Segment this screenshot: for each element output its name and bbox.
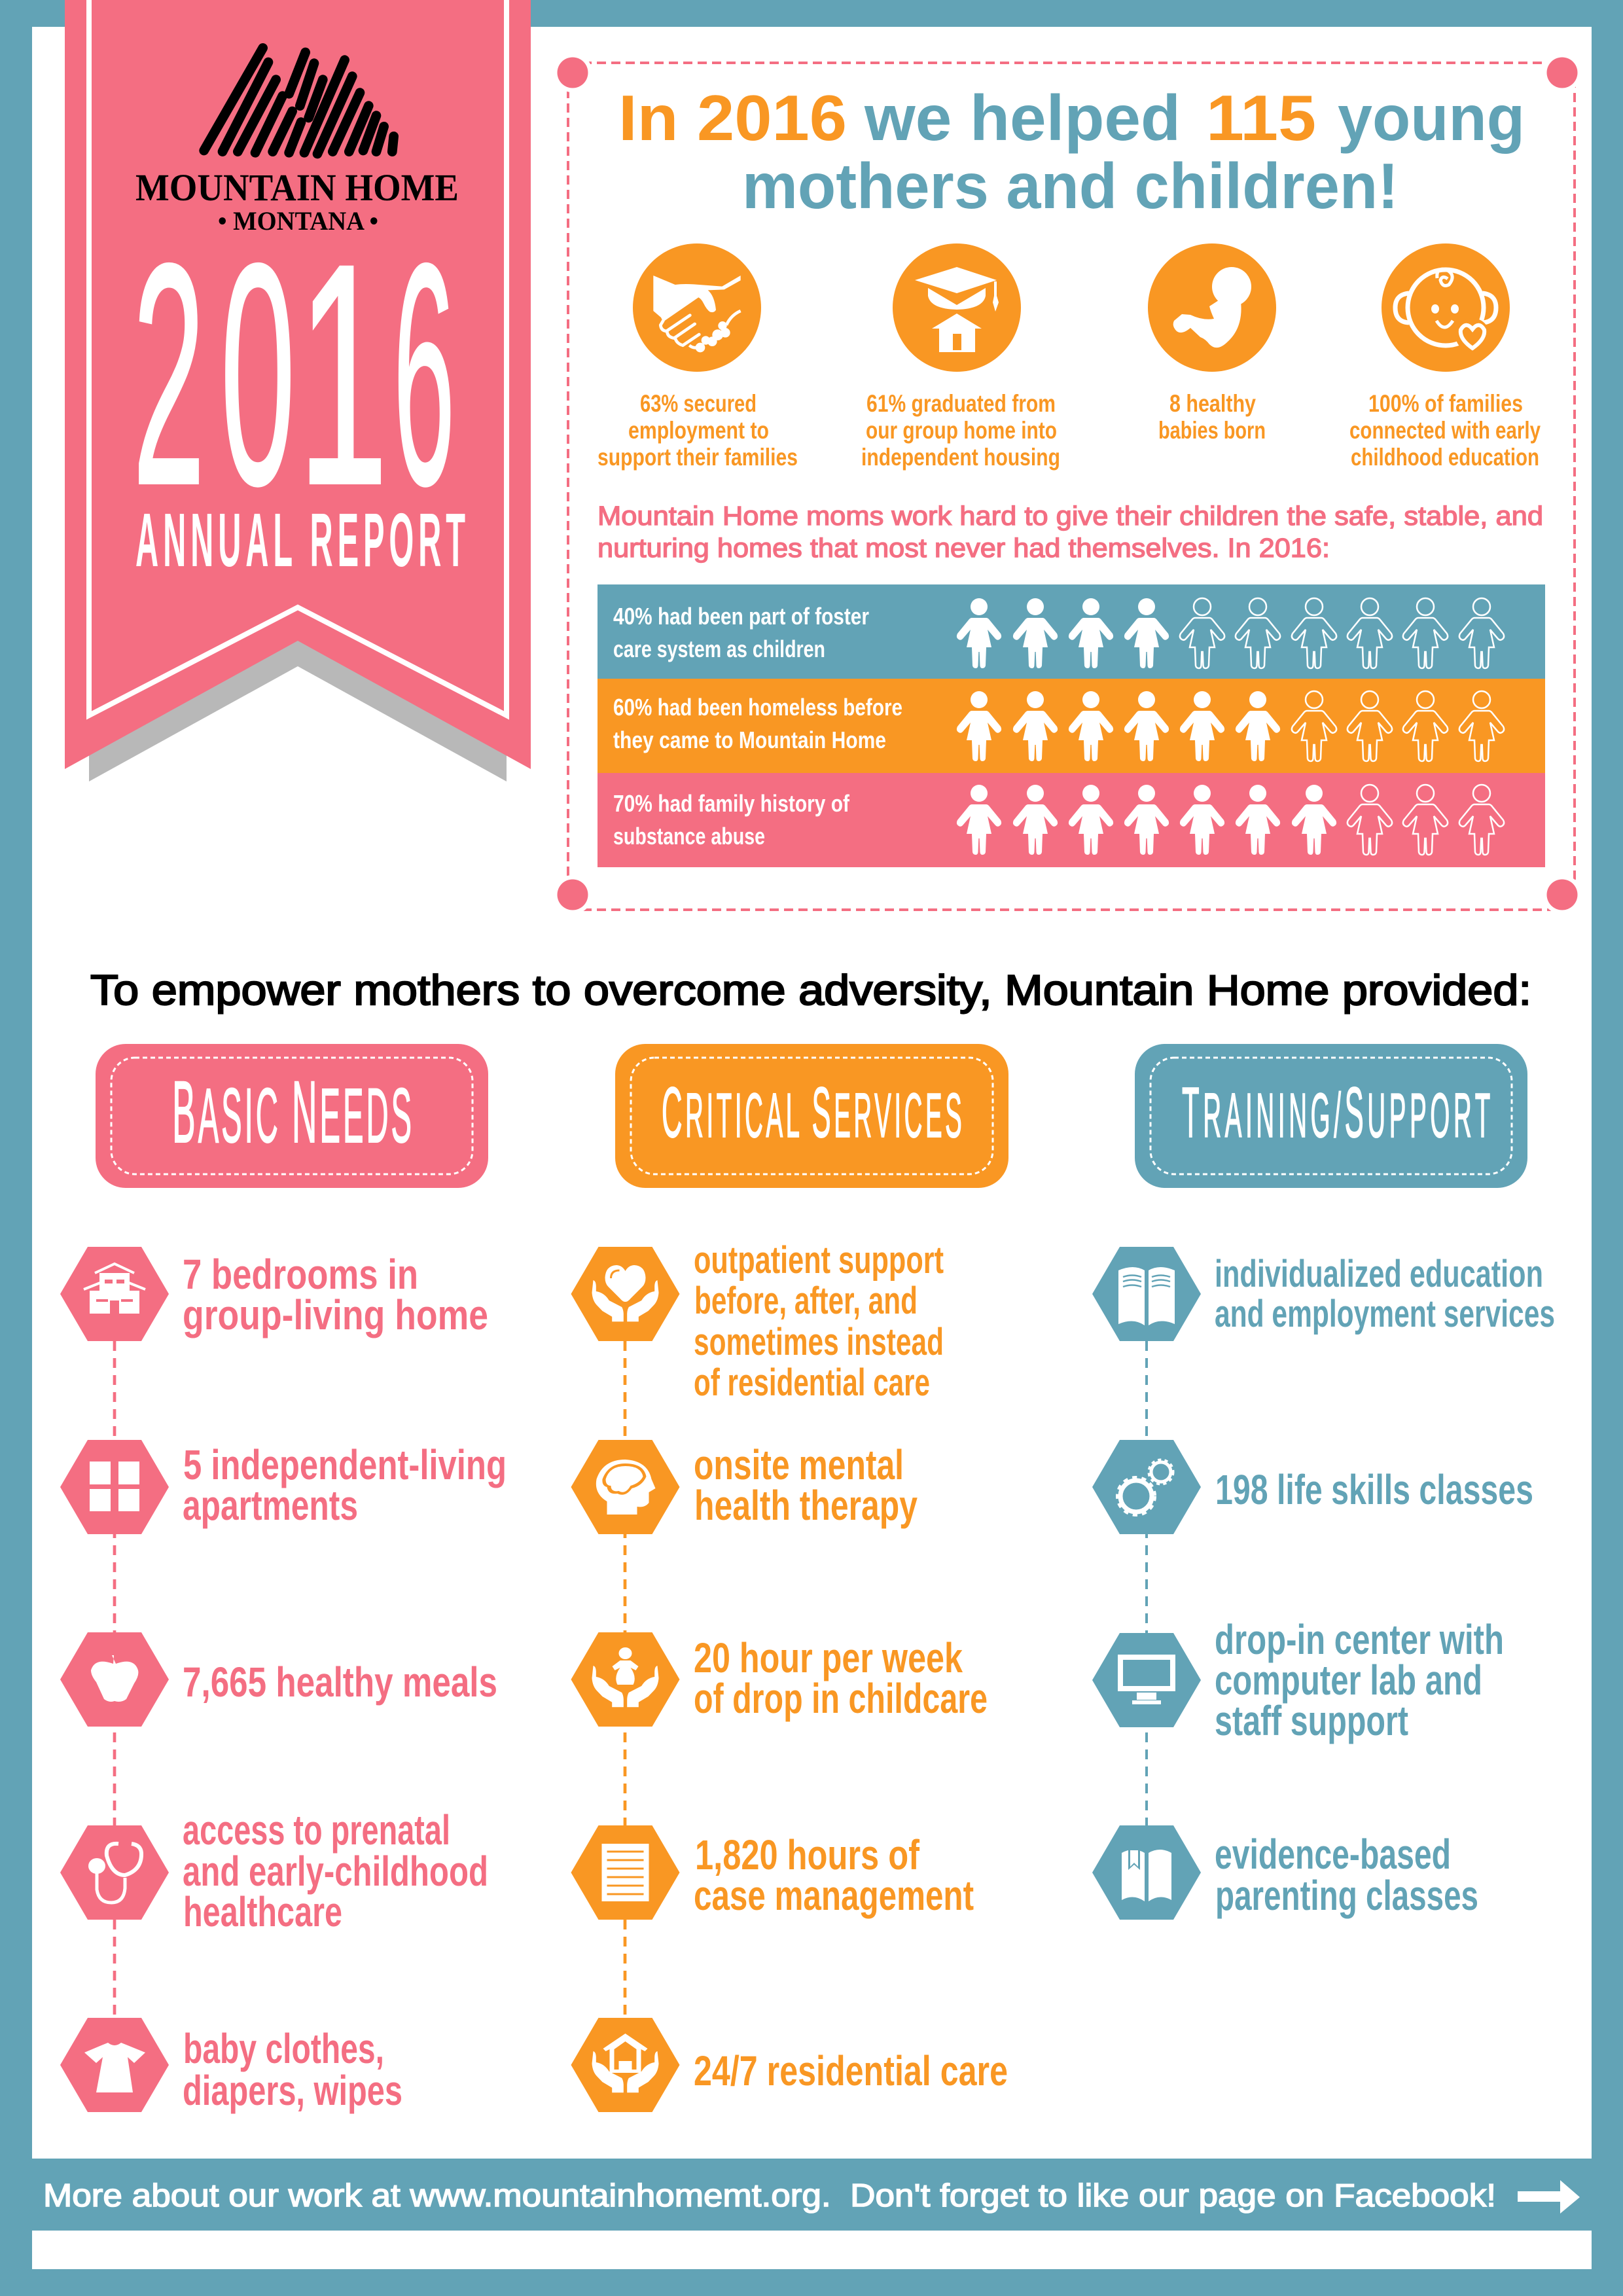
item text bbox=[183, 2025, 402, 2114]
row: substance abuse 70% bbox=[597, 773, 1545, 867]
icon: heart in hands bbox=[571, 1247, 679, 1341]
item text: evidence-based bbox=[1215, 1831, 1451, 1878]
icon: head with brain bbox=[571, 1440, 679, 1534]
column: training support list bbox=[1092, 1247, 1555, 1920]
paragraph: Mountain Home moms work hard to give their children the safe, stable, and bbox=[597, 501, 1543, 531]
year bbox=[133, 198, 455, 550]
stat: graduated bbox=[861, 243, 1060, 471]
caption: support their families bbox=[597, 444, 798, 471]
corner dot bbox=[1543, 875, 1582, 914]
headline: young bbox=[1338, 82, 1525, 154]
icon: computer bbox=[1092, 1633, 1201, 1727]
item text: and early-childhood bbox=[183, 1848, 488, 1895]
year: 0 bbox=[221, 198, 295, 550]
ribbon banner: 6 bbox=[393, 198, 455, 550]
column: basic needs list bbox=[60, 1247, 507, 2114]
item text: of drop in childcare bbox=[694, 1675, 988, 1722]
item text: parenting classes bbox=[1215, 1872, 1478, 1919]
icon: stethoscope bbox=[60, 1825, 169, 1920]
row label: 40% had been part of foster bbox=[613, 603, 869, 630]
icon: group home bbox=[60, 1247, 169, 1341]
corner dot bbox=[1543, 53, 1582, 92]
caption bbox=[1158, 390, 1266, 444]
item text: 7,665 healthy meals bbox=[183, 1659, 497, 1706]
row label: care system as children bbox=[613, 636, 825, 662]
row label bbox=[613, 603, 869, 662]
stat: babies bbox=[1148, 243, 1276, 444]
caption: 100% of families bbox=[1368, 390, 1523, 417]
item text: before, after, and bbox=[694, 1280, 918, 1322]
item text: onsite mental bbox=[694, 1441, 904, 1488]
caption: 8 healthy bbox=[1169, 390, 1256, 417]
icon: document bbox=[571, 1825, 679, 1920]
row label: substance abuse bbox=[613, 823, 765, 850]
caption: babies born bbox=[1158, 417, 1266, 444]
item text: 24/7 residential care bbox=[694, 2047, 1008, 2094]
timeline connector bbox=[113, 1341, 116, 2018]
footer text: More about our work at www.mountainhomemt.org. Don't forget to like our page on Facebook! bbox=[43, 2178, 1496, 2214]
item text: 20 hour per week bbox=[694, 1634, 963, 1681]
row: homeless 60% bbox=[597, 679, 1545, 773]
category: basic needs bbox=[96, 1044, 488, 1188]
timeline connector bbox=[624, 1341, 626, 2018]
row label: 70% had family history of bbox=[613, 790, 850, 817]
icon: fetus bbox=[1148, 243, 1276, 372]
logo: name: MOUNTAIN HOME bbox=[135, 166, 459, 209]
item text: baby clothes, bbox=[183, 2025, 384, 2072]
panel: 2016 results bbox=[553, 53, 1582, 914]
caption: our group home into bbox=[866, 417, 1057, 444]
section heading: To empower mothers to overcome adversity, Mountain Home provided: bbox=[90, 966, 1531, 1014]
item text: group-living home bbox=[183, 1291, 488, 1338]
item text: healthcare bbox=[183, 1888, 342, 1935]
icon: baby clothes bbox=[60, 2018, 169, 2112]
caption: childhood education bbox=[1351, 444, 1539, 471]
item text bbox=[694, 1239, 944, 1404]
caption: connected with early bbox=[1349, 417, 1541, 444]
pictogram 6 of 10 bbox=[957, 691, 1504, 761]
item text: staff support bbox=[1215, 1697, 1408, 1744]
logo: mountain bbox=[204, 48, 394, 154]
item text: diapers, wipes bbox=[183, 2067, 402, 2114]
item text bbox=[694, 1831, 974, 1919]
arrow bbox=[1518, 2180, 1580, 2214]
dashed frame bbox=[568, 63, 1575, 910]
pictogram 4 of 10 bbox=[957, 598, 1504, 668]
stat: employment bbox=[597, 243, 798, 471]
item text: case management bbox=[694, 1872, 974, 1919]
headline: mothers and children! bbox=[742, 150, 1399, 222]
headline bbox=[618, 82, 1525, 222]
annual report: ANNUAL REPORT bbox=[135, 497, 465, 583]
headline: In 2016 bbox=[618, 82, 847, 154]
item text bbox=[694, 1634, 988, 1722]
item text: apartments bbox=[183, 1482, 358, 1529]
row label: 60% had been homeless before bbox=[613, 694, 902, 721]
icon: apple bbox=[60, 1632, 169, 1727]
caption: employment to bbox=[628, 417, 769, 444]
ribbon inner border bbox=[89, 0, 507, 715]
ribbon shadow bbox=[89, 589, 507, 781]
icon: open book bbox=[1092, 1247, 1201, 1341]
item text bbox=[183, 1251, 488, 1338]
item text: 7 bedrooms in bbox=[183, 1251, 418, 1298]
item text: computer lab and bbox=[1215, 1657, 1482, 1704]
item text: of residential care bbox=[694, 1361, 930, 1404]
pictogram 7 of 10 bbox=[957, 785, 1504, 855]
item text: 5 independent-living bbox=[183, 1441, 507, 1488]
icon: graduate cap and house bbox=[893, 243, 1021, 372]
headline: 115 bbox=[1206, 82, 1316, 154]
year: 2 bbox=[133, 198, 205, 550]
item text: 1,820 hours of bbox=[695, 1831, 920, 1878]
timeline connector bbox=[1145, 1341, 1148, 1825]
icon: book with bookmark bbox=[1092, 1825, 1201, 1920]
caption bbox=[861, 390, 1060, 471]
stat: early education bbox=[1349, 243, 1541, 471]
category: basic needs: BASIC NEEDS bbox=[172, 1063, 412, 1161]
paragraph: nurturing homes that most never had themselves. In 2016: bbox=[597, 533, 1330, 563]
row label bbox=[613, 694, 902, 753]
row label: they came to Mountain Home bbox=[613, 726, 886, 753]
caption bbox=[597, 390, 798, 471]
item text: drop-in center with bbox=[1215, 1616, 1504, 1663]
item text: outpatient support bbox=[694, 1239, 944, 1282]
row: foster care 40% bbox=[597, 584, 1545, 679]
caption bbox=[1349, 390, 1541, 471]
item text bbox=[183, 1806, 488, 1935]
item text bbox=[1215, 1831, 1478, 1919]
item text: access to prenatal bbox=[183, 1806, 450, 1854]
column: critical services list bbox=[571, 1239, 1008, 2112]
year: 1 bbox=[298, 198, 388, 550]
caption: 61% graduated from bbox=[866, 390, 1056, 417]
paragraph bbox=[597, 501, 1543, 563]
item text bbox=[1215, 1616, 1504, 1744]
icon: house in hands bbox=[571, 2018, 679, 2112]
ribbon body bbox=[65, 0, 531, 769]
logo: state: • MONTANA • bbox=[218, 206, 378, 236]
icon: gears bbox=[1092, 1440, 1201, 1534]
category: training support: TRAINING/SUPPORT bbox=[1182, 1073, 1490, 1153]
corner dot bbox=[553, 875, 592, 914]
icon: baby in hands bbox=[571, 1632, 679, 1727]
icon: apartments bbox=[60, 1440, 169, 1534]
caption: 63% secured bbox=[640, 390, 757, 417]
category: training support bbox=[1135, 1044, 1527, 1188]
icon: handshake bbox=[633, 243, 761, 372]
icon: baby face bbox=[1382, 243, 1510, 372]
headline: we helped bbox=[864, 82, 1181, 154]
ribbon banner bbox=[65, 0, 531, 781]
item text: health therapy bbox=[694, 1482, 918, 1529]
row label bbox=[613, 790, 850, 850]
item text bbox=[694, 1441, 918, 1529]
item text bbox=[1215, 1253, 1555, 1335]
category: critical services bbox=[615, 1044, 1008, 1188]
category: critical services: CRITICAL SERVICES bbox=[662, 1073, 962, 1153]
item text bbox=[183, 1441, 507, 1529]
caption: independent housing bbox=[861, 444, 1060, 471]
item text: sometimes instead bbox=[694, 1321, 944, 1363]
corner dot bbox=[553, 53, 592, 92]
